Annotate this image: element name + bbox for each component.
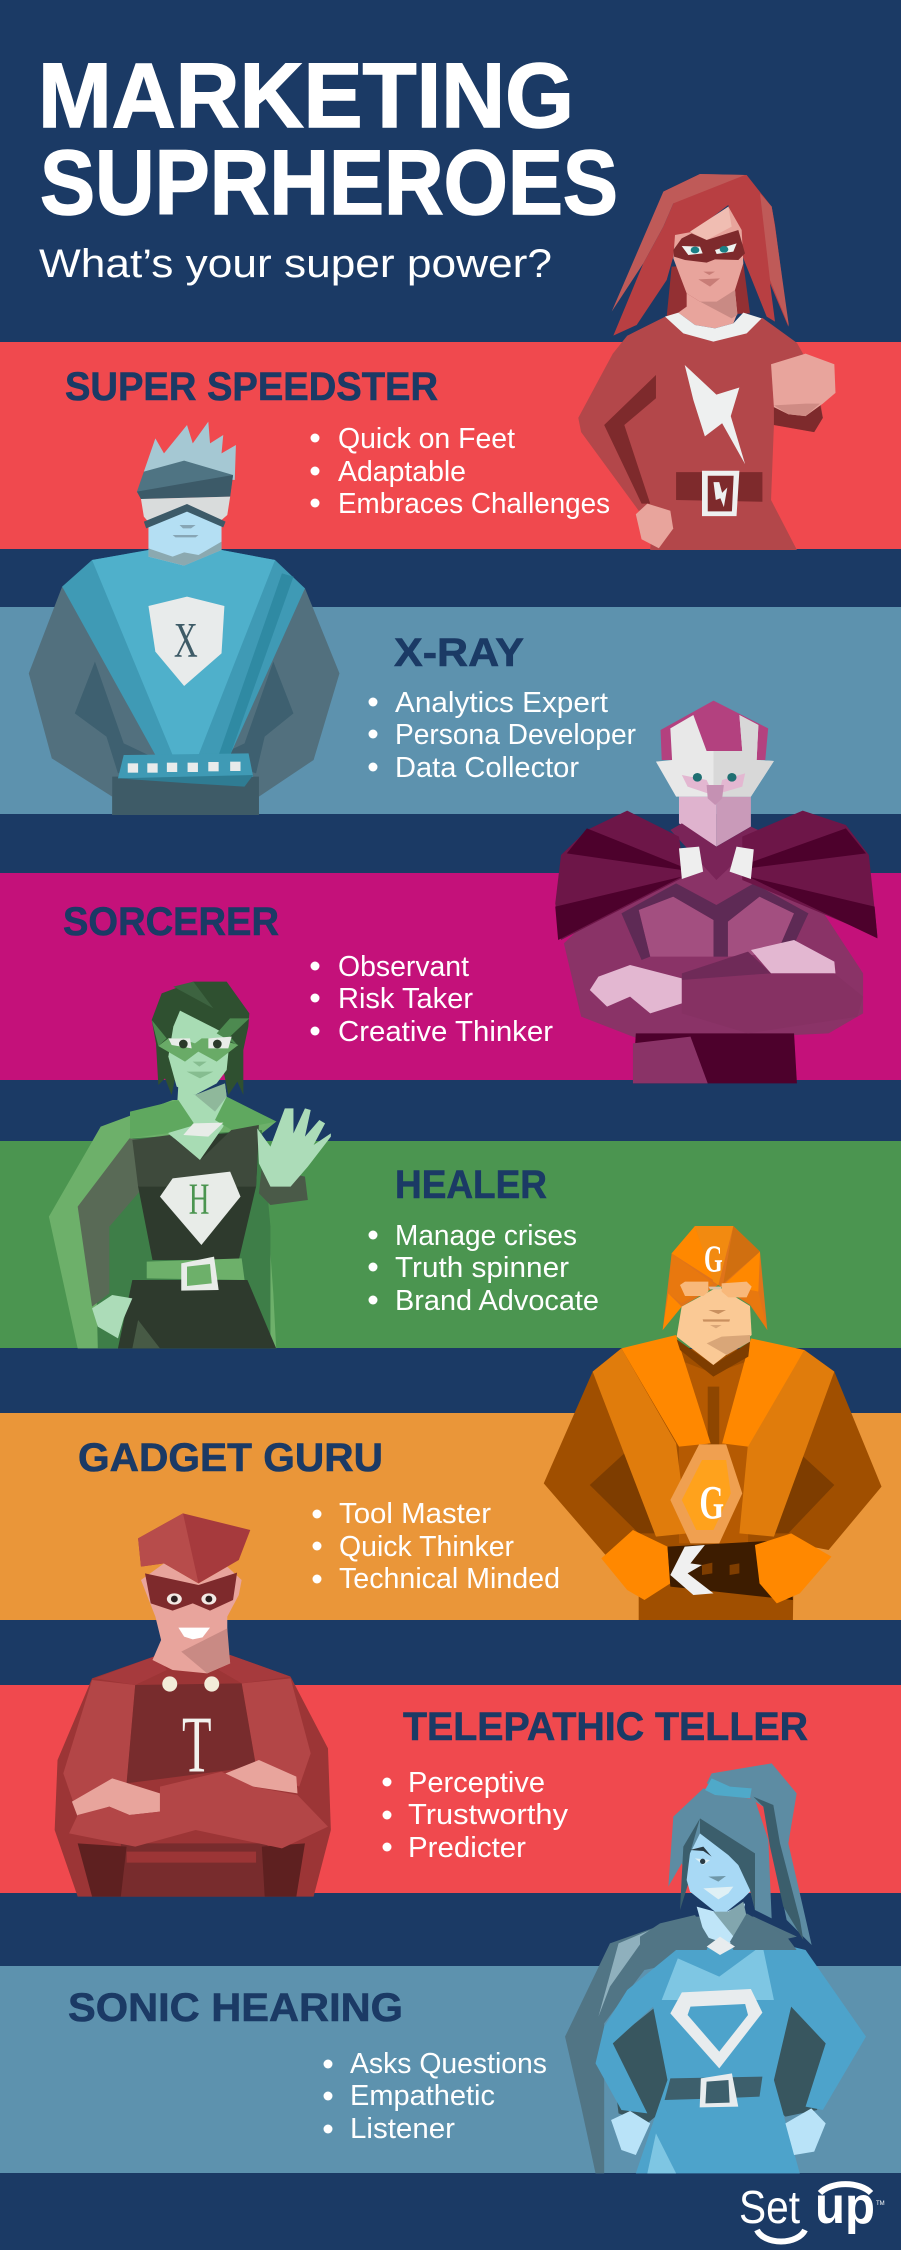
hero: x-ray man	[29, 422, 339, 815]
heading: sorcerer: SORCERER	[63, 900, 279, 944]
hero: gadget guru man: G	[704, 1238, 723, 1280]
list: telepathic teller traits: Perceptive	[408, 1767, 545, 1799]
list: healer traits: Manage crises	[395, 1220, 577, 1252]
list: x-ray traits: Data Collector	[395, 752, 579, 784]
list: sonic hearing traits	[324, 2048, 547, 2145]
hero: telepathic teller man: T	[182, 1701, 212, 1790]
heading: x-ray: X-RAY	[394, 631, 524, 675]
list: telepathic teller traits	[382, 1767, 569, 1864]
logo: setup: up	[815, 2177, 875, 2235]
list: sorcerer traits: Risk Taker	[338, 983, 473, 1015]
hero: red woman speedster	[578, 174, 835, 550]
list: sorcerer traits	[310, 951, 553, 1048]
list: super speedster traits: Adaptable	[338, 456, 466, 488]
panel: super speedster	[0, 342, 901, 549]
logo: setup: Set	[739, 2181, 800, 2233]
panel: telepathic teller	[0, 1685, 901, 1893]
list: sorcerer traits: Observant	[338, 951, 469, 983]
list: gadget guru traits: Technical Minded	[339, 1563, 560, 1595]
hero: gadget guru man	[544, 1226, 882, 1620]
logo: setup: TM	[876, 2201, 885, 2207]
heading: super speedster: SUPER SPEEDSTER	[65, 365, 438, 409]
list: x-ray traits: Analytics Expert	[395, 687, 608, 719]
heading: sonic hearing: SONIC HEARING	[68, 1986, 403, 2030]
hero: healer woman	[49, 982, 331, 1348]
logo: setup	[739, 2177, 885, 2242]
list: super speedster traits	[310, 423, 610, 520]
list: sorcerer traits: Creative Thinker	[338, 1016, 553, 1048]
list: super speedster traits: Quick on Feet	[338, 423, 515, 455]
panel: sorcerer	[0, 873, 901, 1080]
list: telepathic teller traits: Trustworthy	[408, 1799, 569, 1831]
panel: sonic hearing	[0, 1966, 901, 2173]
list: healer traits: Brand Advocate	[395, 1285, 599, 1317]
list: super speedster traits: Embraces Challenges	[338, 488, 610, 520]
list: x-ray traits: Persona Developer	[395, 719, 636, 751]
list: gadget guru traits	[312, 1498, 560, 1595]
list: telepathic teller traits: Predicter	[408, 1832, 526, 1864]
title: MARKETING	[38, 45, 574, 147]
hero: sorcerer man	[555, 701, 877, 1083]
subtitle: What’s your super power?	[39, 242, 552, 286]
list: healer traits	[368, 1220, 599, 1317]
panel: gadget guru	[0, 1413, 901, 1620]
list: x-ray traits	[368, 687, 636, 784]
list: gadget guru traits: Quick Thinker	[339, 1531, 514, 1563]
heading: gadget guru: GADGET GURU	[78, 1436, 383, 1480]
hero: x-ray man: X	[174, 613, 198, 668]
list: sonic hearing traits: Asks Questions	[350, 2048, 547, 2080]
hero: telepathic teller man	[55, 1513, 331, 1897]
list: gadget guru traits: Tool Master	[339, 1498, 491, 1530]
heading: telepathic teller: TELEPATHIC TELLER	[403, 1705, 808, 1749]
list: healer traits: Truth spinner	[395, 1252, 569, 1284]
hero: sonic hearing woman	[565, 1763, 866, 2173]
heading: healer: HEALER	[395, 1163, 547, 1207]
panel: healer	[0, 1141, 901, 1348]
title: SUPRHEROES	[40, 132, 618, 234]
list: sonic hearing traits: Listener	[350, 2113, 455, 2145]
hero: healer woman: H	[189, 1175, 209, 1224]
hero: gadget guru man: G	[699, 1476, 724, 1529]
title	[38, 45, 618, 234]
panel: x-ray	[0, 607, 901, 814]
list: sonic hearing traits: Empathetic	[350, 2080, 495, 2112]
